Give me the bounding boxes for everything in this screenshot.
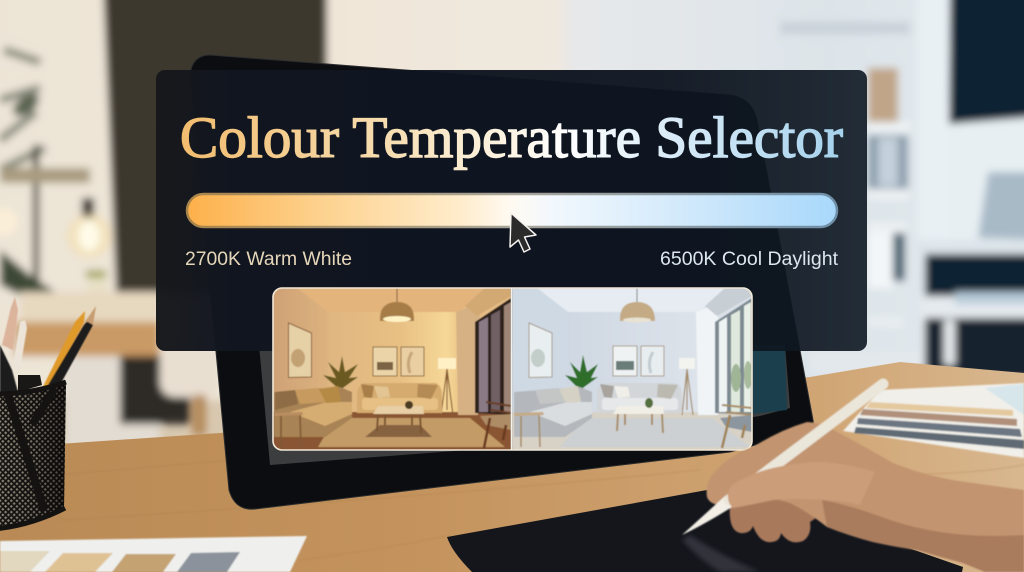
pendant lamp — [396, 288, 398, 303]
pendant lamp — [636, 288, 638, 303]
curtain and window — [456, 300, 480, 415]
blurred side table and stool — [15, 292, 220, 451]
warm room, 2700K — [273, 288, 511, 450]
curled fingers — [730, 490, 835, 542]
tablet device — [190, 55, 813, 509]
left sofa — [274, 387, 352, 437]
drawing tablet on the desk — [447, 490, 963, 572]
cool room, 6500K — [512, 288, 752, 450]
colour swatch sheet, right — [843, 383, 1024, 458]
floor lamp — [438, 358, 456, 369]
room frame and split line — [273, 288, 752, 450]
tablet screen strip — [259, 345, 790, 465]
title: Colour Temperature Selector — [180, 105, 843, 170]
blurred office background — [0, 0, 1024, 451]
armchair — [486, 402, 511, 413]
stylus — [682, 384, 883, 535]
dark wall panel — [103, 0, 327, 300]
room comparison image — [273, 288, 752, 450]
glass selector panel — [156, 70, 867, 351]
thumb over stylus — [728, 462, 875, 508]
label: cool end: 6500K Cool Daylight — [660, 249, 839, 270]
back of hand and wrist — [707, 422, 1024, 572]
blurred window wall and laptop — [915, 0, 1024, 380]
plant — [323, 356, 358, 390]
plant — [565, 355, 598, 390]
coffee table — [613, 406, 664, 414]
colour swatch sheet, bottom left — [0, 536, 307, 572]
side table — [274, 412, 303, 416]
wall art pair — [613, 346, 637, 376]
pencil cup with pencils — [0, 297, 96, 530]
blurred desk lamp and plant — [0, 50, 111, 325]
blurred shelving unit — [780, 22, 920, 372]
cursor arrow icon — [510, 213, 536, 252]
pencils — [0, 297, 96, 425]
hand holding stylus — [682, 384, 1024, 572]
wrist shadow — [822, 500, 1024, 572]
mesh cup — [0, 382, 66, 530]
rug — [560, 418, 750, 447]
temperature gradient slider — [187, 194, 837, 227]
left sofa — [514, 387, 592, 437]
armchair — [722, 405, 752, 415]
label: warm end: 2700K Warm White — [185, 249, 352, 270]
wooden desk — [0, 362, 1024, 572]
wall art left — [288, 323, 312, 378]
wall art left — [529, 323, 552, 378]
rug — [318, 418, 505, 447]
side table — [514, 412, 544, 416]
curtain and window — [696, 300, 718, 415]
coffee table — [373, 406, 424, 414]
wall art pair — [373, 347, 397, 376]
back sofa — [597, 383, 682, 413]
floor lamp — [679, 358, 695, 369]
back sofa — [357, 383, 442, 413]
